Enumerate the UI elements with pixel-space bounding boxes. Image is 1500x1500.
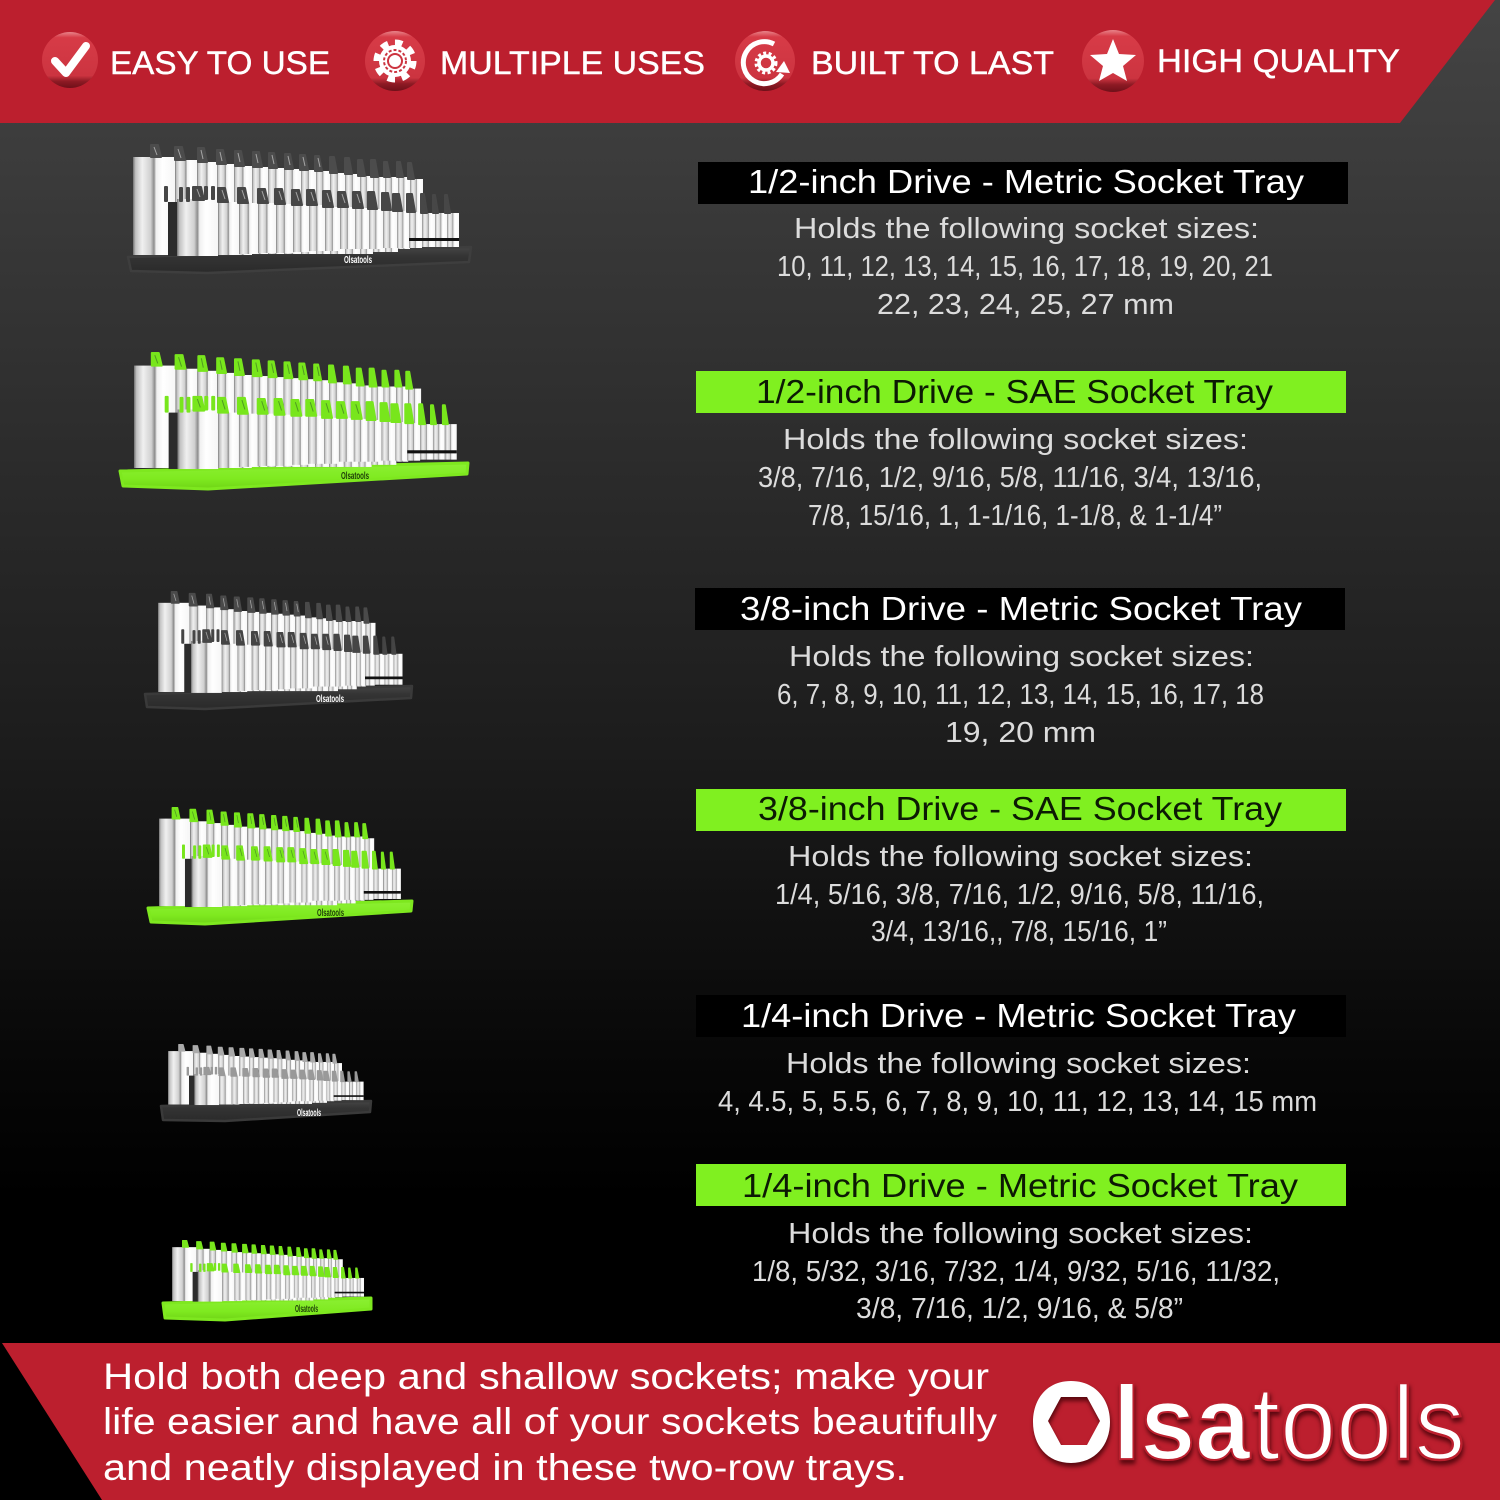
panel: 1/2 SAE sizes: 1/2-inch Drive - SAE Socket Tray bbox=[756, 373, 1274, 410]
panel: 3/8 metric sizes: Holds the following socket sizes: bbox=[789, 641, 1254, 673]
panel: 3/8 metric sizes bbox=[695, 588, 1345, 749]
label: high quality: HIGH QUALITY bbox=[1157, 43, 1400, 79]
panel: 1/2 metric sizes: 10, 11, 12, 13, 14, 15, 16, 17, 18, 19, 20, 21 bbox=[777, 251, 1273, 283]
panel: 1/4 green sizes: 1/8, 5/32, 3/16, 7/32, 1/4, 9/32, 5/16, 11/32, bbox=[752, 1256, 1280, 1288]
logo: Olsatools: tools bbox=[1252, 1365, 1465, 1482]
footer text: Hold both deep and shallow sockets; make your bbox=[103, 1356, 989, 1397]
panel: 3/8 metric sizes: 6, 7, 8, 9, 10, 11, 12, 13, 14, 15, 16, 17, 18 bbox=[777, 679, 1264, 711]
panel: 1/2 SAE sizes bbox=[696, 371, 1346, 532]
panel: 3/8 SAE sizes bbox=[696, 789, 1346, 948]
tray image: 3/8 SAE: Olsatools bbox=[317, 908, 344, 919]
panel: 1/2 metric sizes: Holds the following socket sizes: bbox=[794, 213, 1259, 245]
panel: 3/8 metric sizes: 3/8-inch Drive - Metric Socket Tray bbox=[740, 590, 1303, 627]
icon: gear bbox=[365, 31, 425, 91]
panel: 1/2 SAE sizes: Holds the following socket sizes: bbox=[783, 424, 1248, 456]
panel: 1/2 SAE sizes: 7/8, 15/16, 1, 1-1/16, 1-1/8, & 1-1/4” bbox=[808, 500, 1222, 532]
panel: 1/4 metric sizes: 1/4-inch Drive - Metric Socket Tray bbox=[741, 997, 1297, 1034]
logo: Olsatools: lsa bbox=[1113, 1365, 1252, 1482]
tray image: 1/4 SAE bbox=[163, 1241, 371, 1320]
tray image: 1/4 metric: Olsatools bbox=[297, 1108, 321, 1119]
panel: 3/8 SAE sizes: 1/4, 5/16, 3/8, 7/16, 1/2, 9/16, 5/8, 11/16, bbox=[775, 879, 1264, 911]
footer text: and neatly displayed in these two-row trays. bbox=[103, 1447, 907, 1488]
panel: 3/8 metric sizes: 19, 20 mm bbox=[945, 717, 1096, 749]
logo: Olsatools bbox=[1033, 1365, 1465, 1482]
panel: 1/2 metric sizes bbox=[698, 162, 1348, 321]
panel: 1/4 green sizes: 1/4-inch Drive - Metric Socket Tray bbox=[742, 1167, 1299, 1204]
panel: 3/8 SAE sizes: 3/8-inch Drive - SAE Socket Tray bbox=[758, 790, 1283, 827]
panel: 1/4 metric sizes bbox=[696, 995, 1346, 1118]
panel: 1/2 metric sizes: 1/2-inch Drive - Metric Socket Tray bbox=[748, 163, 1305, 200]
panel: 1/4 metric sizes: Holds the following socket sizes: bbox=[786, 1048, 1251, 1080]
tray image: 1/4 SAE: Olsatools bbox=[295, 1304, 318, 1315]
footer text: life easier and have all of your sockets beautifully bbox=[103, 1401, 998, 1442]
icon: check mark bbox=[42, 32, 98, 88]
panel: 1/2 metric sizes: 22, 23, 24, 25, 27 mm bbox=[877, 289, 1174, 321]
tray image: 1/2 SAE: Olsatools bbox=[341, 471, 369, 482]
label: multiple uses: MULTIPLE USES bbox=[440, 45, 705, 81]
tray image: 1/4 metric bbox=[161, 1045, 371, 1121]
header banner bbox=[0, 0, 1495, 123]
tray image: 1/2 metric bbox=[128, 145, 471, 273]
panel: 1/4 green sizes: Holds the following socket sizes: bbox=[788, 1218, 1253, 1250]
tray image: 1/2 SAE bbox=[120, 353, 468, 489]
tray image: 1/2 metric: Olsatools bbox=[344, 255, 372, 266]
icon: cycle gear bbox=[735, 31, 795, 91]
panel: 3/8 SAE sizes: Holds the following socket sizes: bbox=[788, 841, 1253, 873]
footer text bbox=[103, 1356, 998, 1488]
label: easy to use: EASY TO USE bbox=[110, 45, 330, 81]
panel: 1/4 green sizes bbox=[696, 1164, 1346, 1325]
panel: 1/2 SAE sizes: 3/8, 7/16, 1/2, 9/16, 5/8, 11/16, 3/4, 13/16, bbox=[758, 462, 1262, 494]
panel: 1/4 metric sizes: 4, 4.5, 5, 5.5, 6, 7, 8, 9, 10, 11, 12, 13, 14, 15 mm bbox=[718, 1086, 1317, 1118]
tray image: 3/8 metric bbox=[145, 592, 412, 709]
label: built to last: BUILT TO LAST bbox=[811, 45, 1054, 81]
tray image: 3/8 metric: Olsatools bbox=[316, 694, 344, 705]
panel: 1/4 green sizes: 3/8, 7/16, 1/2, 9/16, & 5/8” bbox=[856, 1293, 1183, 1325]
footer banner bbox=[2, 1343, 1500, 1500]
icon: star bbox=[1082, 30, 1144, 92]
tray image: 3/8 SAE bbox=[148, 808, 412, 924]
panel: 3/8 SAE sizes: 3/4, 13/16,, 7/8, 15/16, 1” bbox=[871, 916, 1167, 948]
